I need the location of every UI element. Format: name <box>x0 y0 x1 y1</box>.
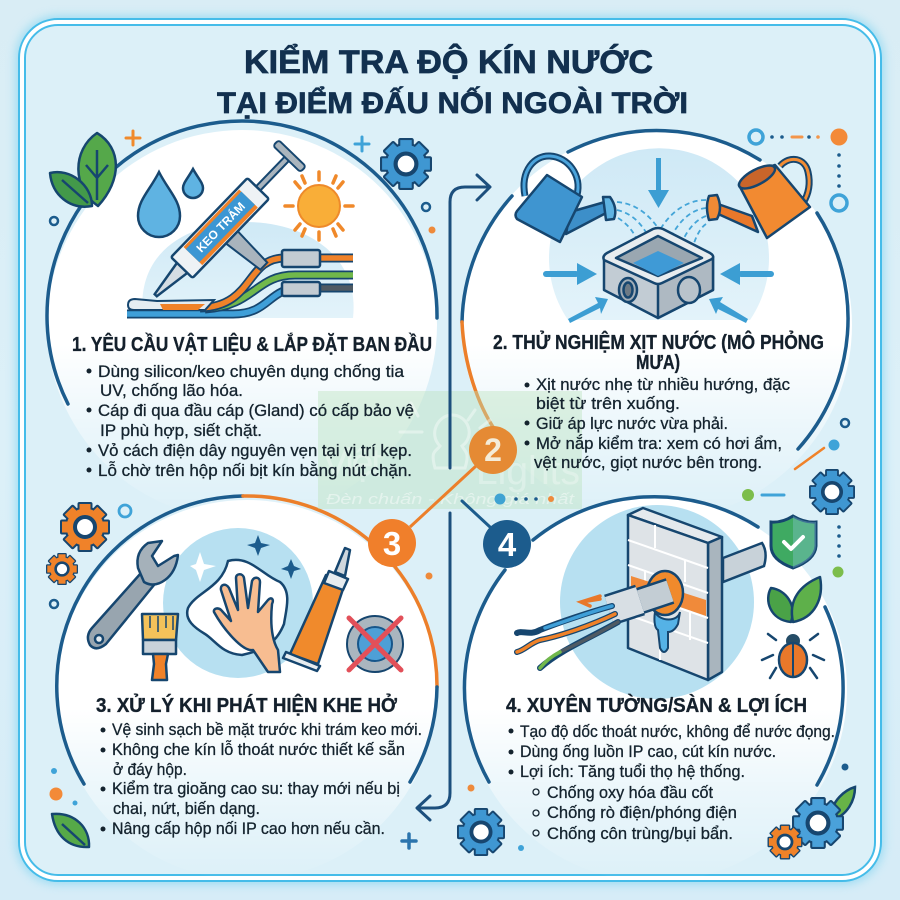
text block: step 1: Lỗ chờ trên hộp nối bịt kín bằng nút chặn. <box>98 461 412 480</box>
watermark <box>318 391 582 509</box>
illustration: repair tools <box>88 528 403 680</box>
icon: blue watering can <box>516 156 615 242</box>
arrow: drainage slope <box>581 596 600 606</box>
badge: step 3: 3 <box>383 525 401 562</box>
badge: step 4 <box>483 520 531 568</box>
arrow: flow to step 2 <box>450 175 490 468</box>
badge: step 2: 2 <box>484 432 502 468</box>
icon: small water drop <box>183 169 203 198</box>
text block: step 2: vệt nước, giọt nước bên trong. <box>534 453 762 472</box>
text block: step 4: Chống côn trùng/bụi bẩn. <box>547 824 733 843</box>
wires <box>517 606 618 668</box>
sealant ring <box>647 571 683 615</box>
text block: step 1: Vỏ cách điện dây nguyên vẹn tại vị trí kẹp. <box>98 441 412 460</box>
badge: step 2 <box>469 426 517 474</box>
icon: sealant tube <box>283 548 350 671</box>
text block: step 2: Giữ áp lực nước vừa phải. <box>536 414 728 433</box>
text block: step 3: ở đáy hộp. <box>113 760 187 779</box>
title: KIỂM TRA ĐỘ KÍN NƯỚC <box>244 44 653 80</box>
panel: step 3 disc <box>57 496 437 880</box>
heading: step 4: 4. XUYÊN TƯỜNG/SÀN & LỢI ÍCH <box>506 693 807 717</box>
water drip <box>654 612 680 652</box>
icon: gear bottom centre <box>459 810 503 854</box>
watermark: Lights <box>476 449 580 493</box>
text block: step 1: IP phù hợp, siết chặt. <box>100 421 262 440</box>
icon: large water drop <box>138 172 180 237</box>
text block: step 3 <box>100 720 422 838</box>
sealant gun <box>142 140 334 335</box>
panel: step 4 disc <box>463 497 847 882</box>
text block: step 1: Cáp đi qua đầu cáp (Gland) có cấp bảo vệ <box>98 401 414 420</box>
title <box>217 44 688 120</box>
heading: step 2 <box>493 330 824 374</box>
conduit <box>609 591 670 610</box>
text block: step 4: Tạo độ dốc thoát nước, không để nước đọng. <box>520 722 835 741</box>
icon: junction box <box>603 228 713 318</box>
icon: shield <box>771 516 816 568</box>
icon: gear cluster bottom right <box>769 787 855 858</box>
watermark: Đèn chuẩn - Không giá nhất <box>326 491 575 508</box>
cables <box>127 258 353 314</box>
text block: step 3: Không che kín lỗ thoát nước thiết kế sẵn <box>112 740 405 759</box>
illustration: wall penetration <box>517 505 766 699</box>
text block: step 4 <box>508 722 835 843</box>
text block: step 1 <box>86 362 414 480</box>
spray <box>617 200 706 250</box>
text block: step 4: Chống oxy hóa đầu cốt <box>547 783 713 802</box>
text block: step 1: Dùng silicon/keo chuyên dụng chống tia <box>98 362 405 381</box>
connectors <box>282 250 320 267</box>
text block: step 1: UV, chống lão hóa. <box>100 381 243 400</box>
brick wall <box>628 508 722 680</box>
rear conduit <box>723 543 766 582</box>
connector: step 3 to step 2 <box>410 466 476 527</box>
decorative dots <box>50 128 849 851</box>
text block: step 2: Xịt nước nhẹ từ nhiều hướng, đặc <box>536 375 790 394</box>
text block: step 2: biệt từ trên xuống. <box>536 394 680 413</box>
text block: step 3: Kiểm tra gioăng cao su: thay mới nếu bị <box>112 779 400 798</box>
icon: beetle <box>762 634 824 678</box>
heading: step 2: MƯA) <box>636 352 680 374</box>
heading: step 3: 3. XỬ LÝ KHI PHÁT HIỆN KHE HỞ <box>96 693 398 717</box>
icon: gear top-left panel <box>382 140 430 188</box>
icon: leaf bottom-left <box>52 814 89 847</box>
text block: step 2 <box>524 375 790 472</box>
icon: hand <box>214 574 280 672</box>
text block: step 4: Dùng ống luồn IP cao, cút kín nước. <box>520 742 776 761</box>
sealant gun: KEO TRÁM <box>193 199 248 255</box>
icon: gear orange small <box>47 554 77 584</box>
connector: step 4 <box>462 501 490 527</box>
text block: step 3: Vệ sinh sạch bề mặt trước khi trám keo mới. <box>112 720 422 739</box>
icon: sun <box>285 172 353 240</box>
text block: step 4: Chống rò điện/phóng điện <box>547 803 737 822</box>
icon: do not cover drain <box>347 616 403 672</box>
icon: wrench <box>88 541 178 648</box>
illustration: water spray test <box>516 148 810 323</box>
arrow: flow to step 3 <box>417 513 450 820</box>
heading: step 2: 2. THỬ NGHIỆM XỊT NƯỚC (MÔ PHỎNG <box>493 330 824 354</box>
text block: step 3: chai, nứt, biến dạng. <box>113 799 260 818</box>
decorative dots: centre <box>494 494 554 504</box>
panel: step 1 disc <box>47 121 437 520</box>
badge: step 3 <box>368 519 416 567</box>
icon: gear right <box>811 471 853 513</box>
icon: leaves top-left <box>50 133 116 207</box>
text block: step 4: Lợi ích: Tăng tuổi thọ hệ thống. <box>520 762 745 781</box>
watermark: Việt <box>322 441 382 485</box>
icon: paint brush <box>142 614 178 680</box>
illustration: sealant, water, sun and cables <box>127 140 354 335</box>
text block: step 2: Mở nắp kiểm tra: xem có hơi ẩm, <box>536 434 782 453</box>
title: TẠI ĐIỂM ĐẤU NỐI NGOÀI TRỜI <box>217 86 688 120</box>
badge: step 4: 4 <box>498 526 517 563</box>
arrows: water pressure directions <box>543 158 774 323</box>
icon: gear orange large <box>62 504 108 550</box>
icon: leaves <box>768 577 821 622</box>
icon: sparkles <box>190 535 301 582</box>
sealant bead <box>128 299 214 310</box>
panel: step 2 disc <box>462 130 852 520</box>
icon: orange watering can <box>707 159 810 238</box>
heading: step 1: 1. YÊU CẦU VẬT LIỆU & LẮP ĐẶT BAN ĐẦU <box>72 332 432 356</box>
icon: cloth <box>187 560 287 655</box>
text block: step 3: Nâng cấp hộp nối IP cao hơn nếu cần. <box>112 819 385 838</box>
